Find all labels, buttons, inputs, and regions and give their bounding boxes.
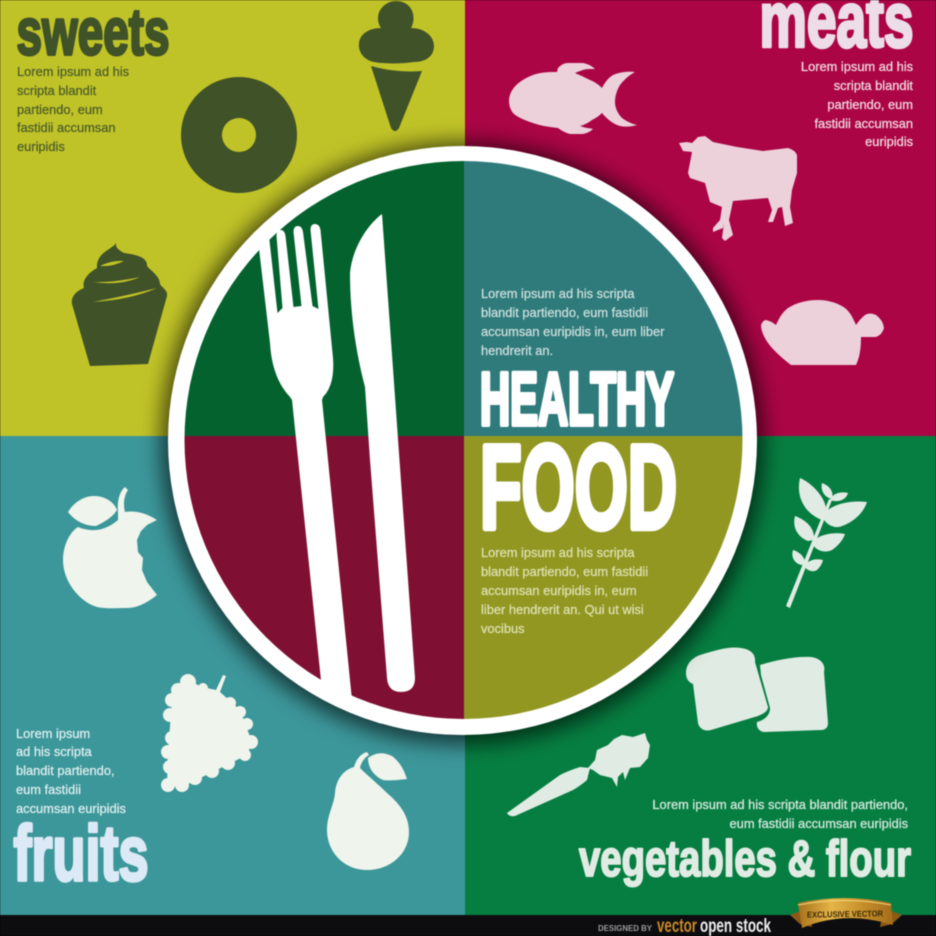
icon: fish <box>509 63 637 134</box>
text: teal description: accumsan euripidis in, eum liber <box>481 324 665 339</box>
text: teal description: Lorem ipsum ad his scripta <box>481 286 635 301</box>
icon: pear <box>327 752 409 870</box>
panel: meats <box>465 0 936 436</box>
text: vegetables description <box>652 797 908 831</box>
text: fruits description <box>16 726 126 816</box>
badge: exclusive vector <box>790 898 902 928</box>
text: sweets description: euripidis <box>17 139 65 154</box>
text: sweets description: fastidii accumsan <box>17 120 116 135</box>
text: fruits description: blandit partiendo, <box>16 763 115 778</box>
panel: sweets <box>0 0 465 436</box>
panel: fruits <box>0 436 465 915</box>
text: sweets description: scripta blandit <box>17 83 97 98</box>
text: teal description: blandit partiendo, eum fastidii <box>481 305 648 320</box>
icon: grapes <box>161 674 258 792</box>
text: vegetables description: eum fastidii accumsan euripidis <box>730 816 908 831</box>
text: sweets description: Lorem ipsum ad his <box>17 64 129 79</box>
icon: wheat <box>786 478 867 608</box>
text: fruits description: accumsan euripidis <box>16 801 126 816</box>
icon: carrot <box>507 733 650 816</box>
text: olive description <box>481 545 648 636</box>
text: fruits description: ad his scripta <box>16 744 93 759</box>
icon: cow <box>679 136 797 241</box>
text: olive description: Lorem ipsum ad his scripta <box>481 545 635 560</box>
text: teal description <box>481 286 665 358</box>
text: sweets description <box>17 64 129 154</box>
text: meats description <box>801 59 913 149</box>
plate rim <box>168 146 757 735</box>
text: olive description: liber hendrerit an. Qui ut wisi <box>481 602 644 617</box>
text: meats description: scripta blandit <box>834 78 913 93</box>
text: fruits description: eum fastidii <box>16 782 81 797</box>
text: olive description: blandit partiendo, eum fastidii <box>481 564 648 579</box>
icon: apple <box>63 487 157 608</box>
icon: chicken <box>761 300 884 365</box>
text: teal description: hendrerit an. <box>481 343 553 358</box>
footer bar <box>0 915 936 936</box>
icon: ice cream <box>359 1 434 131</box>
text: meats description: euripidis <box>865 134 913 149</box>
plate quadrants <box>180 158 748 724</box>
title: healthy: HEALTHY <box>480 358 674 440</box>
text: fruits description: Lorem ipsum <box>16 726 90 741</box>
badge: exclusive vector: EXCLUSIVE VECTOR <box>807 908 883 920</box>
icon: donut <box>181 77 297 193</box>
text: meats description: fastidii accumsan <box>814 116 913 131</box>
heading: fruits: fruits <box>14 809 148 897</box>
icon: cupcake <box>72 242 167 366</box>
text: sweets description: partiendo, eum <box>17 102 103 117</box>
footer credit: DESIGNED BY <box>598 924 653 933</box>
text: meats description: Lorem ipsum ad his <box>801 59 913 74</box>
plate shadow <box>160 141 764 745</box>
icon: bread slices <box>686 647 828 732</box>
text: vegetables description: Lorem ipsum ad his scripta blandit partiendo, <box>652 797 908 812</box>
text: olive description: vocibus <box>481 621 525 636</box>
panel: vegetables and flour <box>465 436 936 915</box>
text: meats description: partiendo, eum <box>827 97 913 112</box>
icon: knife <box>350 214 415 692</box>
plate <box>168 146 757 735</box>
icon: fork <box>258 224 352 700</box>
title: food: FOOD <box>480 421 677 554</box>
text: olive description: accumsan euripidis in, eum <box>481 583 637 598</box>
